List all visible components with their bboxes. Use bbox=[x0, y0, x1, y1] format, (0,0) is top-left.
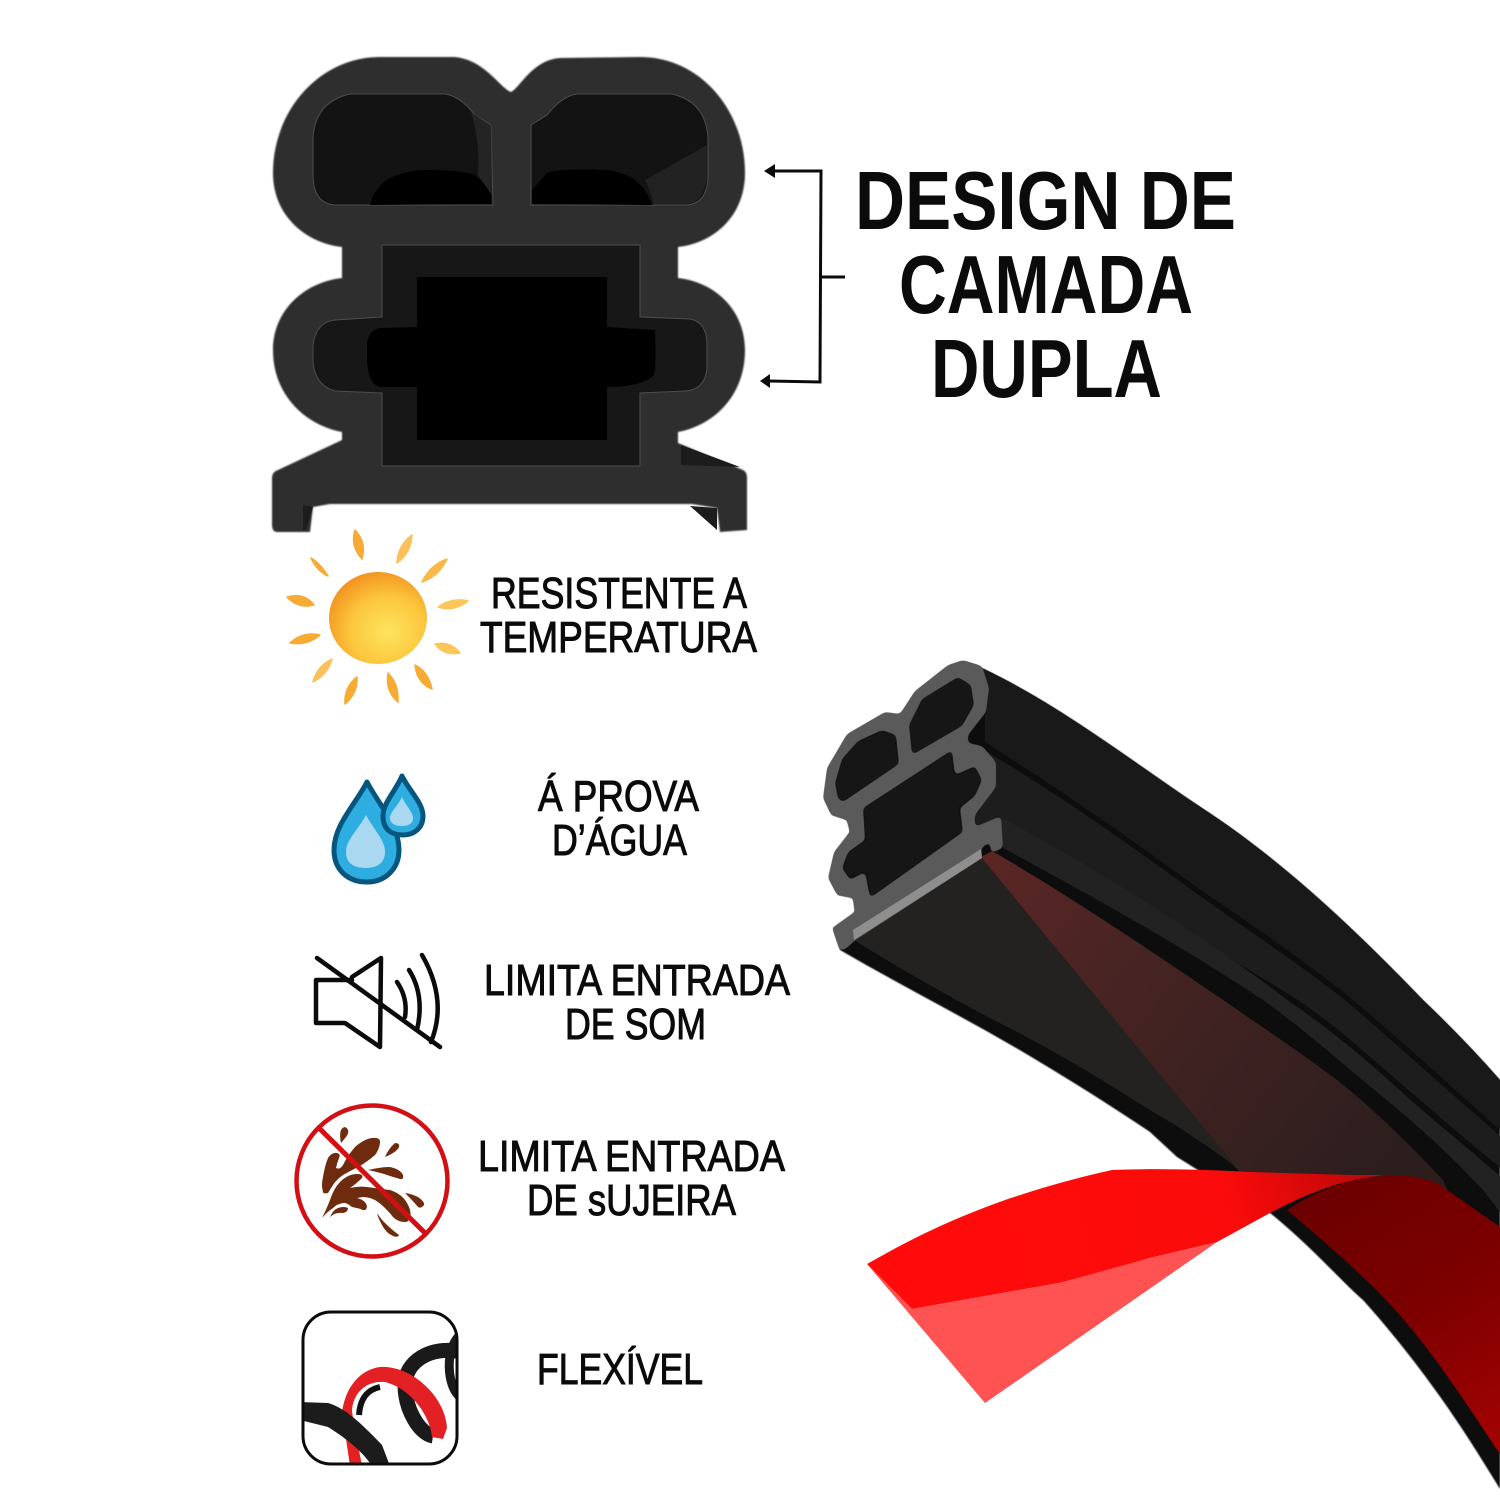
text: limita entrada de sujeira bbox=[478, 1133, 785, 1225]
text: limita entrada de som: LIMITA ENTRADA bbox=[484, 957, 790, 1005]
product photo: sealing strip bbox=[823, 660, 1500, 1489]
infographic canvas bbox=[270, 56, 1500, 1490]
icon: no dirt bbox=[296, 1106, 448, 1256]
icon: flexible coil bbox=[300, 1312, 462, 1466]
peeled tape bright side bbox=[867, 1169, 1383, 1309]
title: DUPLA bbox=[931, 322, 1162, 415]
end face bbox=[823, 660, 1003, 951]
icon: sun bbox=[287, 530, 468, 704]
adhesive backing grey bbox=[854, 857, 1240, 1172]
peeled tape dark underside bbox=[1287, 1176, 1500, 1454]
text: resistente a temperatura: TEMPERATURA bbox=[480, 614, 757, 662]
text: limita entrada de sujeira: DE sUJEIRA bbox=[527, 1177, 736, 1225]
text: a prova d'agua: Á PROVA bbox=[538, 772, 699, 821]
right tube opening bbox=[909, 677, 974, 755]
upper-right chamber bbox=[531, 94, 708, 205]
title: DESIGN DE bbox=[855, 154, 1236, 247]
peeled tape light side bbox=[867, 1242, 1217, 1403]
upper-left chamber bbox=[313, 94, 493, 205]
text: resistente a temperatura: RESISTENTE A bbox=[491, 570, 747, 618]
text: a prova d'agua bbox=[538, 772, 699, 865]
text: limita entrada de som: DE SOM bbox=[565, 1001, 706, 1049]
text: limita entrada de som bbox=[484, 957, 790, 1049]
strip body bbox=[824, 662, 1500, 1489]
middle ridge bbox=[976, 749, 1500, 1167]
profile cross-section bbox=[272, 57, 747, 532]
main tube opening bbox=[842, 750, 982, 898]
text: limita entrada de sujeira: LIMITA ENTRADA bbox=[478, 1133, 785, 1181]
text: flexivel: FLEXÍVEL bbox=[537, 1345, 703, 1394]
text: a prova d'agua: D’ÁGUA bbox=[552, 816, 687, 865]
top ridge bbox=[982, 668, 1500, 1130]
title bbox=[855, 154, 1236, 415]
icon: muted speaker bbox=[316, 955, 440, 1047]
lower chamber bbox=[313, 245, 707, 466]
left tube opening bbox=[835, 730, 899, 802]
text: resistente a temperatura bbox=[480, 570, 757, 662]
adhesive backing red tint bbox=[981, 851, 1447, 1190]
lower flange bbox=[1000, 817, 1500, 1212]
bracket arrow bbox=[760, 164, 845, 388]
light edge bar bbox=[853, 849, 982, 940]
title: CAMADA bbox=[899, 238, 1193, 331]
icon: water drops bbox=[334, 776, 423, 882]
